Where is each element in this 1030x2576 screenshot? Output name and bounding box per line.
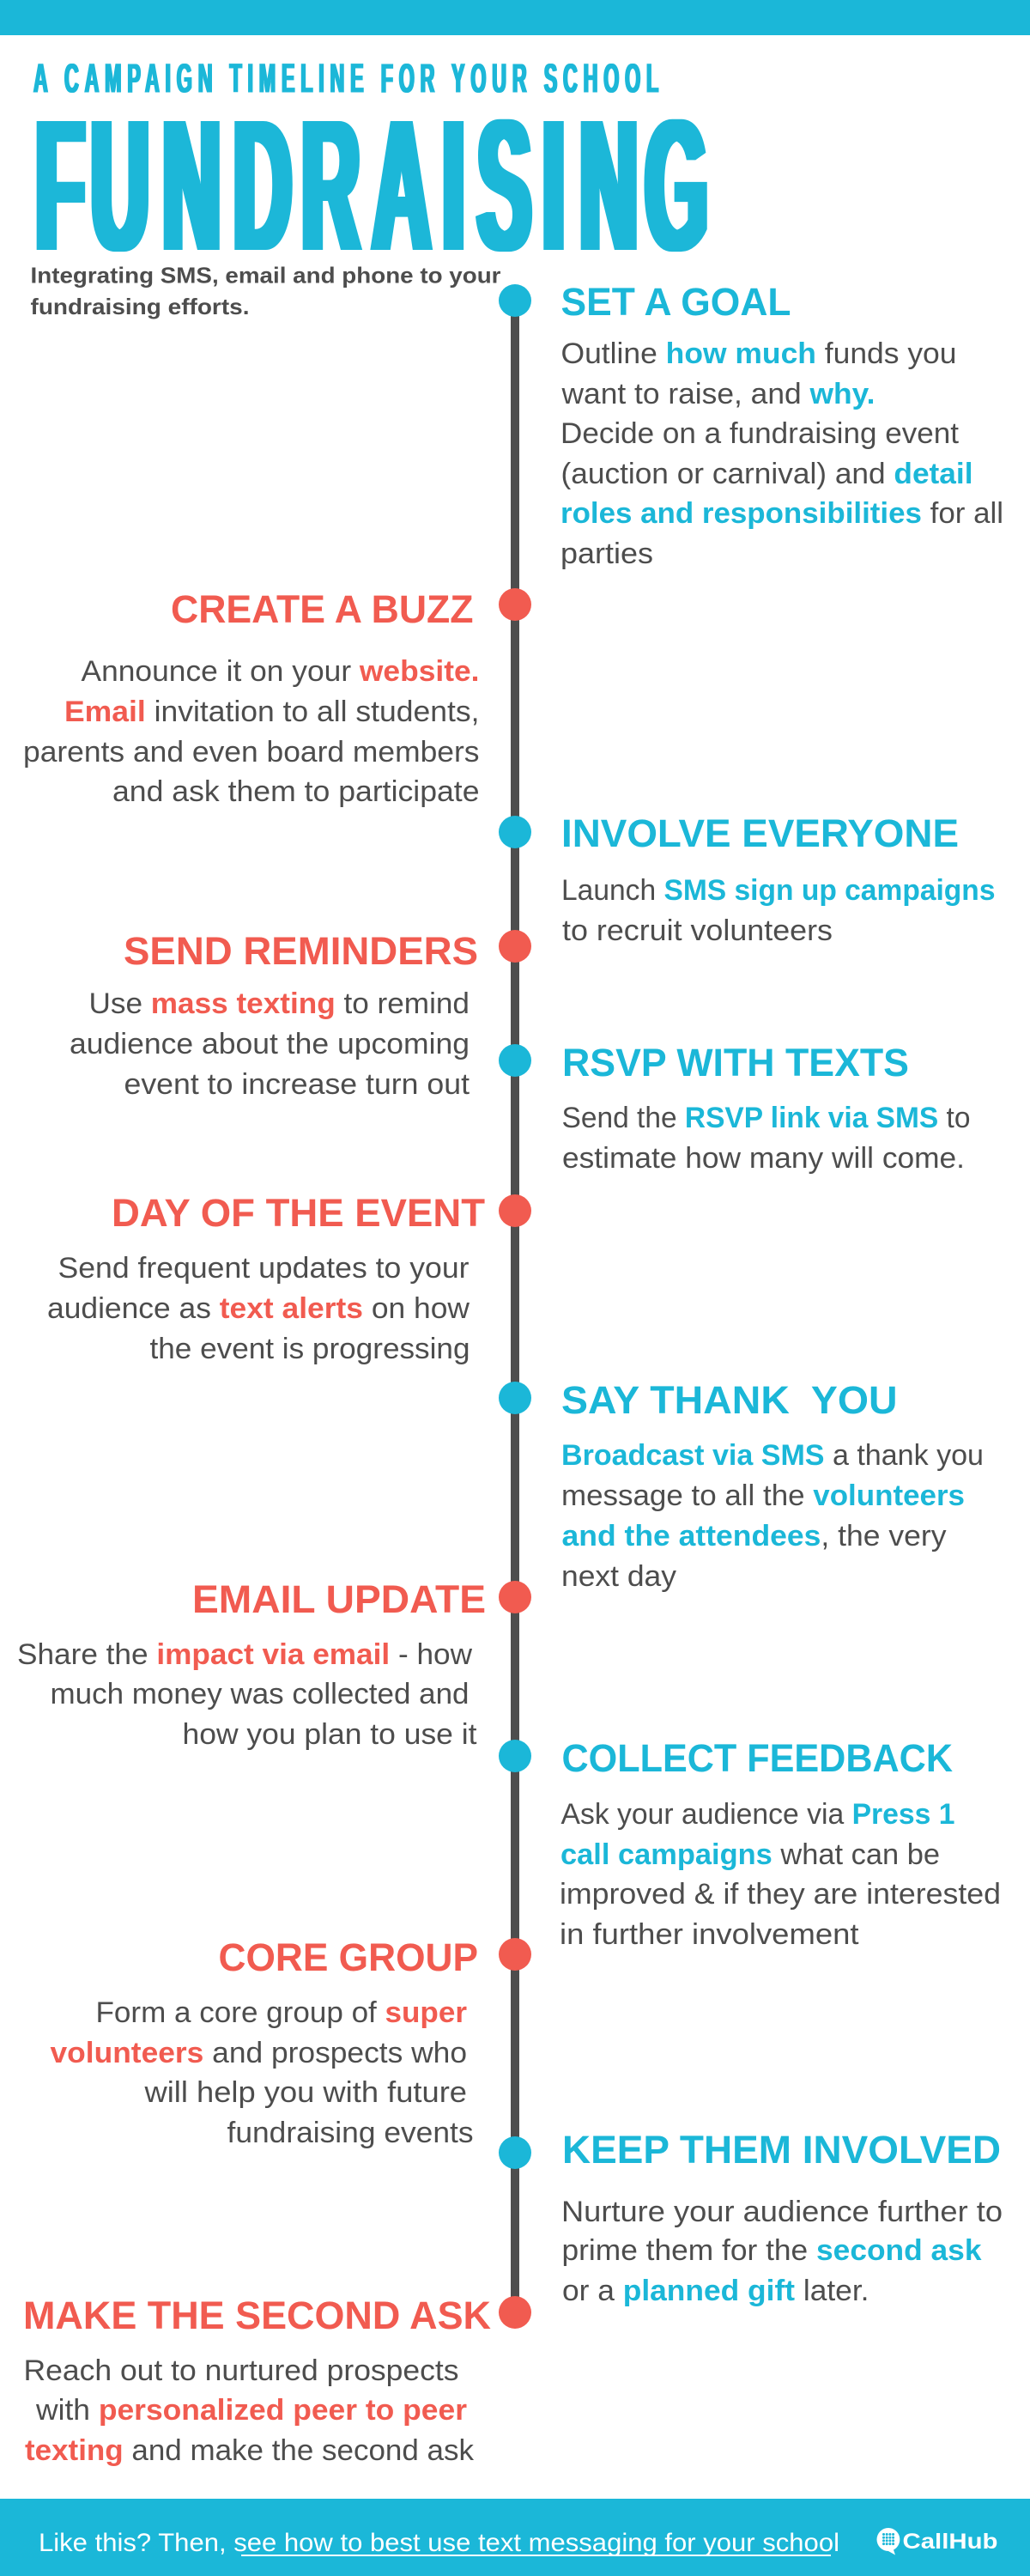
heading: collect feedback: COLLECT FEEDBACK xyxy=(561,1736,953,1780)
body: rsvp with texts: Send the RSVP link via SMS to xyxy=(561,1102,970,1134)
body: keep them involved: Nurture your audience further to xyxy=(561,2196,1003,2228)
body: set a goal xyxy=(560,337,1003,570)
body: email update: much money was collected and xyxy=(50,1678,469,1710)
title: FUNDRAISING xyxy=(35,81,708,290)
body: keep them involved: prime them for the second ask xyxy=(561,2234,982,2267)
body: email update: Share the impact via email - how xyxy=(17,1638,472,1671)
step: collect feedback xyxy=(560,1736,1001,1951)
body: make the second ask: with personalized peer to peer xyxy=(35,2394,467,2427)
timeline line xyxy=(511,301,519,2312)
body: create a buzz: Announce it on your website. xyxy=(81,655,479,688)
step: send reminders xyxy=(70,929,478,1101)
body: make the second ask xyxy=(24,2354,475,2467)
body: say thank you: Broadcast via SMS a thank you xyxy=(561,1439,984,1472)
heading: email update: EMAIL UPDATE xyxy=(192,1577,486,1621)
intro text xyxy=(31,263,501,319)
heading: make the second ask: MAKE THE SECOND ASK xyxy=(23,2293,491,2337)
heading: say thank you: SAY THANK YOU xyxy=(561,1378,898,1422)
body: core group: Form a core group of super xyxy=(96,1996,467,2029)
body: send reminders: audience about the upcoming xyxy=(70,1028,470,1060)
body: day of the event: the event is progressing xyxy=(149,1333,470,1365)
body: core group: fundraising events xyxy=(227,2117,474,2149)
body: create a buzz: Email invitation to all students, xyxy=(64,696,479,728)
body: collect feedback: Ask your audience via Press 1 xyxy=(561,1798,954,1831)
body: core group: volunteers and prospects who xyxy=(50,2037,467,2069)
step: core group xyxy=(50,1935,478,2149)
body: email update: how you plan to use it xyxy=(182,1718,477,1751)
body: say thank you xyxy=(561,1439,984,1593)
body: set a goal: Outline how much funds you xyxy=(561,337,956,370)
body: send reminders xyxy=(70,987,470,1101)
body: keep them involved xyxy=(561,2196,1003,2307)
body: keep them involved: or a planned gift later. xyxy=(562,2275,869,2307)
body: send reminders: event to increase turn out xyxy=(124,1068,470,1101)
body: day of the event xyxy=(47,1252,470,1365)
step: keep them involved xyxy=(561,2128,1003,2307)
heading: keep them involved: KEEP THEM INVOLVED xyxy=(562,2128,1001,2172)
body: say thank you: and the attendees , the very xyxy=(561,1520,946,1552)
heading: involve everyone: INVOLVE EVERYONE xyxy=(561,811,959,855)
logo: CallHub xyxy=(876,2528,997,2555)
body: set a goal: (auction or carnival) and detail xyxy=(561,458,973,490)
heading: set a goal: SET A GOAL xyxy=(561,280,791,324)
body: involve everyone xyxy=(561,874,996,947)
body: say thank you: message to all the volunteers xyxy=(561,1479,965,1512)
step: rsvp with texts xyxy=(561,1041,970,1175)
body: collect feedback: call campaigns what can be xyxy=(560,1838,940,1871)
body: make the second ask: texting and make the second ask xyxy=(25,2434,475,2467)
body: collect feedback: in further involvement xyxy=(560,1918,859,1951)
body: day of the event: Send frequent updates to your xyxy=(58,1252,469,1285)
body: set a goal: want to raise, and why. xyxy=(560,378,876,410)
step: make the second ask xyxy=(23,2293,491,2467)
header xyxy=(31,56,708,319)
timeline markers xyxy=(499,284,531,2329)
body: email update xyxy=(17,1638,477,1751)
step: day of the event xyxy=(47,1191,485,1365)
step: create a buzz xyxy=(23,587,479,808)
heading: rsvp with texts: RSVP WITH TEXTS xyxy=(562,1041,909,1084)
body: create a buzz: parents and even board members xyxy=(23,736,479,769)
body: set a goal: roles and responsibilities for all xyxy=(560,497,1003,530)
body: core group: will help you with future xyxy=(143,2076,467,2109)
step: say thank you xyxy=(561,1378,984,1593)
top bar xyxy=(0,0,1030,35)
body: core group xyxy=(50,1996,474,2149)
body: set a goal: parties xyxy=(560,538,653,570)
body: send reminders: Use mass texting to remind xyxy=(89,987,470,1020)
body: create a buzz xyxy=(23,655,479,808)
intro text: fundraising efforts. xyxy=(31,294,249,319)
intro text: Integrating SMS, email and phone to your xyxy=(31,263,501,289)
footer bar xyxy=(0,2499,1030,2576)
heading: create a buzz: CREATE A BUZZ xyxy=(171,587,474,631)
body: day of the event: audience as text alerts on how xyxy=(47,1292,470,1325)
body: collect feedback xyxy=(560,1798,1001,1951)
footer call to action: Like this? Then, see how to best use text messaging for your school xyxy=(39,2529,839,2557)
body: set a goal: Decide on a fundraising event xyxy=(560,417,960,450)
body: collect feedback: improved & if they are interested xyxy=(560,1878,1001,1911)
logo wordmark: CallHub xyxy=(903,2530,997,2554)
body: rsvp with texts xyxy=(561,1102,970,1175)
body: make the second ask: Reach out to nurtured prospects xyxy=(24,2354,458,2387)
heading: day of the event: DAY OF THE EVENT xyxy=(112,1191,485,1235)
body: create a buzz: and ask them to participate xyxy=(112,775,479,808)
step: email update xyxy=(17,1577,486,1751)
body: rsvp with texts: estimate how many will come. xyxy=(562,1142,965,1175)
step: set a goal xyxy=(560,280,1003,570)
body: say thank you: next day xyxy=(561,1560,676,1593)
heading: core group: CORE GROUP xyxy=(218,1935,478,1979)
body: involve everyone: to recruit volunteers xyxy=(562,914,833,947)
body: involve everyone: Launch SMS sign up campaigns xyxy=(561,874,996,907)
icon: speech bubble keypad xyxy=(876,2528,900,2555)
step: involve everyone xyxy=(561,811,996,947)
heading: send reminders: SEND REMINDERS xyxy=(124,929,478,973)
